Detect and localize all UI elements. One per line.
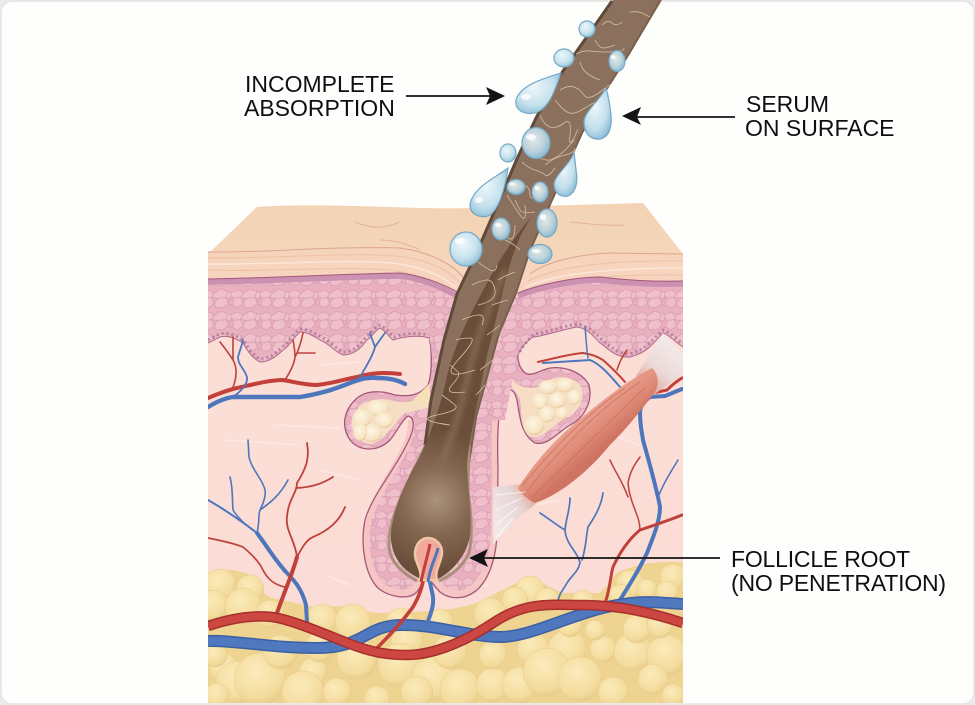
epidermis (208, 273, 683, 420)
dermal papilla (415, 538, 442, 582)
label: incomplete absorption: ABSORPTION (244, 95, 395, 121)
label: follicle root: FOLLICLE ROOT (731, 546, 910, 572)
bulb side strands (389, 445, 471, 581)
arrow: follicle root (469, 549, 720, 567)
arrow: incomplete absorption (406, 87, 505, 105)
round serum beads off the hair (450, 21, 595, 266)
follicle light band (366, 397, 500, 594)
right sebaceous gland (512, 377, 582, 437)
upper-left blood vessels (208, 333, 405, 407)
deep blue vein (208, 602, 683, 648)
arrector pili muscle (493, 333, 683, 545)
label: follicle root: (NO PENETRATION) (731, 570, 946, 596)
skin surface top (210, 203, 682, 297)
hair shaft and bulb (389, 0, 662, 582)
teardrop serum drops (470, 73, 611, 217)
central vessels into papilla (377, 573, 433, 648)
arrow: serum on surface (622, 107, 735, 125)
bead highlights (455, 55, 616, 253)
left sebaceous gland (352, 383, 430, 444)
round serum beads on the hair (492, 50, 625, 264)
serum droplets (450, 21, 625, 266)
right-side vessels (538, 327, 682, 603)
label: incomplete absorption: INCOMPLETE (245, 71, 395, 97)
hair cuticle cracks (428, 12, 650, 425)
follicle outline (345, 330, 590, 598)
dermis layer (208, 328, 683, 613)
label: serum on surface: SERUM (746, 91, 829, 117)
skin cross-section (198, 203, 687, 705)
stratum corneum (208, 222, 683, 295)
fat layer (198, 562, 687, 705)
lower-left blood vessels (208, 440, 345, 622)
deep red artery (208, 605, 683, 655)
shaft highlight (440, 270, 505, 470)
follicle and gland sheath (345, 354, 590, 597)
hair right edge (468, 1, 660, 470)
hair dark left edge (425, 1, 612, 445)
label: serum on surface: ON SURFACE (745, 115, 895, 141)
central shaft and bulb (391, 215, 533, 579)
textured outer hair (395, 0, 662, 520)
